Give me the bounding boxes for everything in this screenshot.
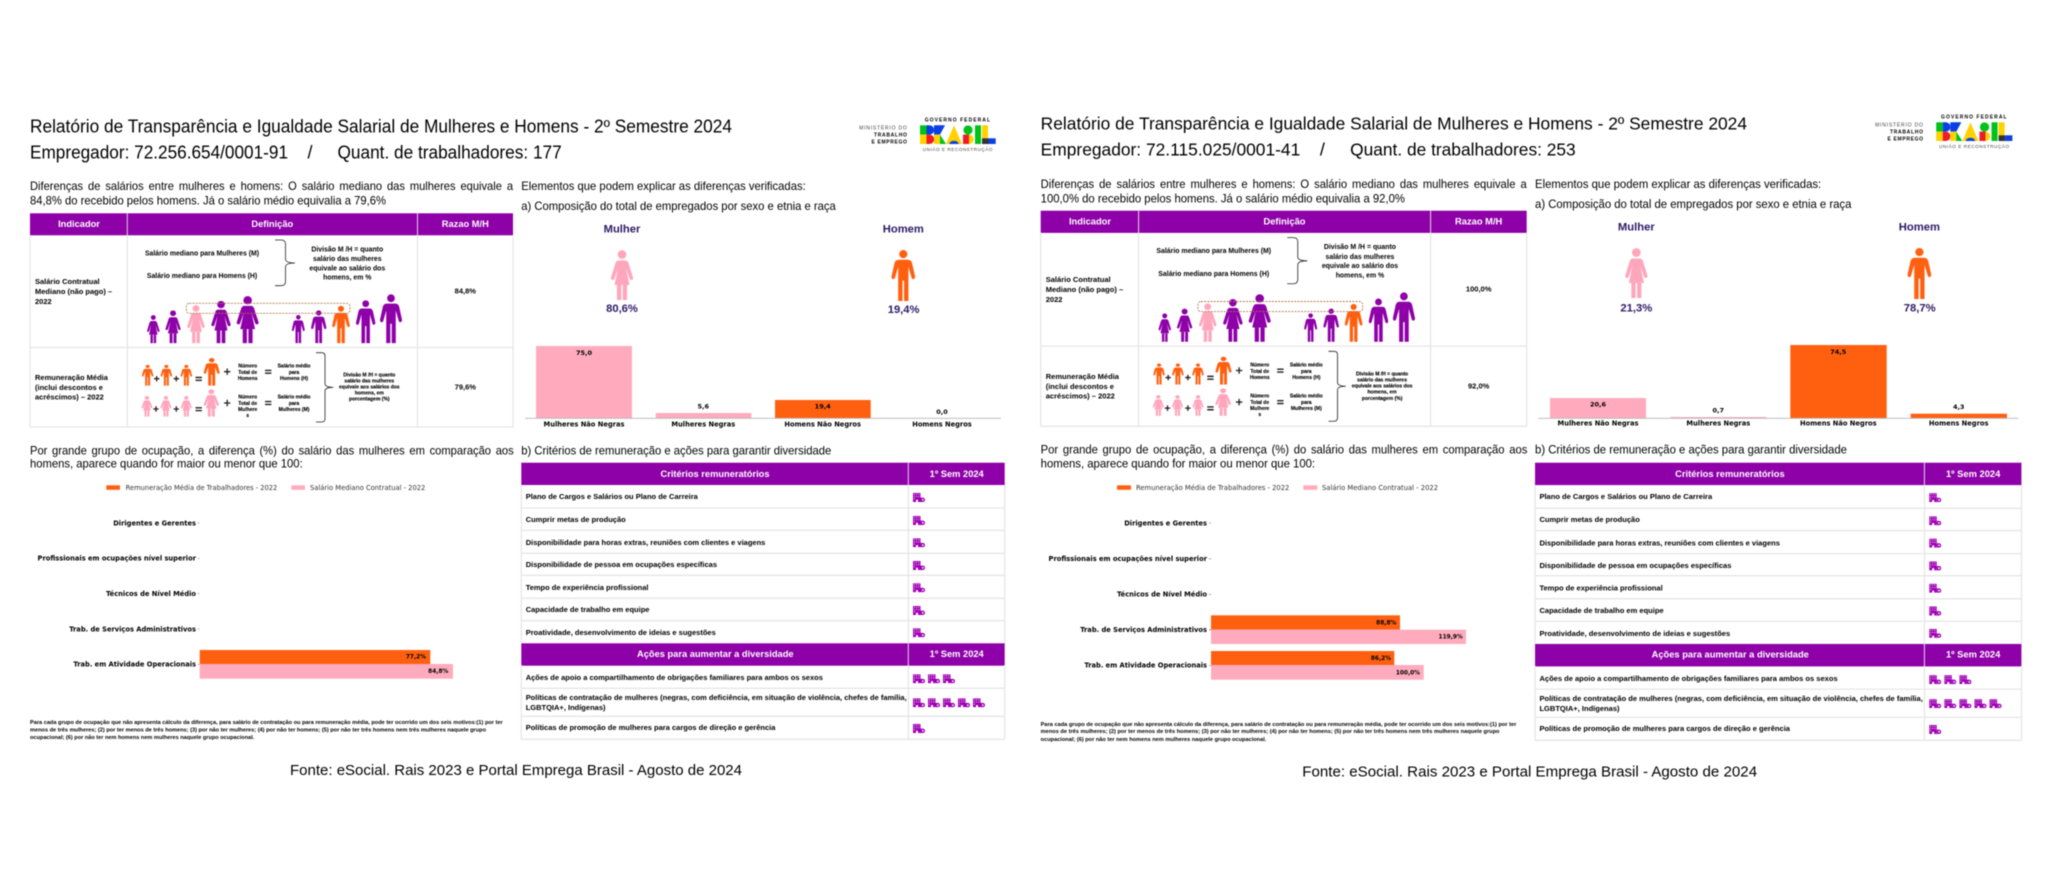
composition: woman share: Mulher [1618,222,1655,234]
criteria rows [526,492,925,637]
logo: Ministério do Trabalho e Emprego and Governo Federal: E EMPREGO [1887,137,1924,142]
row: remuneração média: porcentagem (%) [349,397,390,403]
bar chart: employees by sex and race [525,346,1001,428]
logo: Ministério do Trabalho e Emprego and Governo Federal: GOVERNO FEDERAL [1941,114,2008,120]
table header: Definição [1263,217,1306,227]
row: remuneração média: equivale aos salários dos [339,385,400,391]
row: salário contratual mediano: equivale ao salário dos [309,265,385,272]
bar chart: employees by sex and race: 19,4 [815,403,831,411]
row: remuneração média: homens, em [1367,390,1397,396]
formula: men: Número [238,364,257,370]
row: remuneração média: salário das mulheres [344,379,394,385]
row: salário contratual mediano: salário das mulheres [1325,254,1395,261]
logo: Ministério do Trabalho e Emprego and Governo Federal: TRABALHO [874,132,908,138]
formula: men: Homens [1250,375,1270,381]
logo: Ministério do Trabalho e Emprego and Governo Federal: UNIÃO E RECONSTRUÇÃO [923,146,993,152]
header: actions [637,649,985,659]
row: salário contratual mediano: 2022 [35,297,52,306]
table header: Indicador [58,219,100,229]
row: salário contratual mediano: 84,8% [455,286,476,295]
formula: men: Homens (H) [280,376,308,382]
salary difference text [30,179,513,208]
bar chart: employees by sex and race: 4,3 [1953,403,1964,411]
bar chart: occupation groups [1049,484,1466,680]
report 2: employer 72.115.025/0001-41 [1041,113,2021,781]
row: remuneração média: Remuneração Média [35,373,109,382]
action rows: LGBTQIA+, Indígenas) [1539,704,1620,713]
heading: elements that explain differences: Elementos que podem explicar as diferenças verificadas: [521,179,806,193]
logo: Ministério do Trabalho e Emprego and Governo Federal: MINISTÉRIO DO [1875,121,1924,128]
logo: Ministério do Trabalho e Emprego and Governo Federal [1875,114,2012,149]
action rows: Políticas de contratação de mulheres (negras, com deficiência, em situação de violência, chefes de família, [1539,694,1923,703]
salary difference text [1041,177,1527,205]
composition: man share: Homem [1899,222,1940,234]
bar chart: employees by sex and race: Mulheres Não Negras [544,420,624,428]
row: salário contratual mediano: Salário mediano para Mulheres (M) [145,250,259,257]
row: remuneração média: acréscimos) – 2022 [35,393,104,402]
row: remuneração média [1046,351,1490,421]
bar chart: occupation groups: Dirigentes e Gerentes [113,519,196,527]
heading: elements that explain differences: a) Composição do total de empregados por sexo e etnia e raça [521,199,836,213]
formula: men: para [1301,369,1312,375]
action rows: Políticas de promoção de mulheres para cargos de direção e gerência [1539,724,1791,733]
composition: man share [883,224,924,316]
source: Fonte: eSocial. Rais 2023 e Portal Emprega Brasil - Agosto de 2024 [1302,764,1757,781]
footnote: menos de três mulheres; (2) por ter menos de três homens; (3) por não ter mulheres; (4) por não ter homens; (5) por não ter três homens nem três mulheres naquele grupo [1041,729,1500,735]
employer id and workers count: / [308,142,313,162]
legend [106,484,425,492]
formula: women: Número [1250,394,1269,400]
bar chart: employees by sex and race: 5,6 [698,403,710,411]
header: actions [1652,650,2001,660]
occupation group text [30,443,514,470]
heading b: b) Critérios de remuneração e ações para garantir diversidade [1535,442,1847,456]
row: remuneração média: Divisão M /H = quanto [343,373,395,379]
table: indicators [30,213,513,427]
bar chart: employees by sex and race: 0,7 [1713,406,1724,414]
logo: Ministério do Trabalho e Emprego and Governo Federal: GOVERNO FEDERAL [925,117,991,123]
bar chart: occupation groups: Trab. de Serviços Administrativos [1080,626,1207,634]
criteria rows: Disponibilidade para horas extras, reuniões com clientes e viagens [1539,538,1780,547]
table header: Definição [251,219,294,229]
header: actions: Ações para aumentar a diversidade [1652,650,1809,660]
row: salário contratual mediano: Salário mediano para Homens (H) [1158,271,1269,278]
criteria rows [1539,492,1941,638]
employer id and workers count [30,142,562,162]
criteria rows: Capacidade de trabalho em equipe [526,605,649,614]
header: criteria [660,469,985,479]
composition: woman share: 80,6% [606,303,638,315]
row: salário contratual mediano: salário das mulheres [313,256,382,263]
legend: Remuneração Média de Trabalhadores - 2022 [1136,484,1289,492]
bar chart: employees by sex and race: 20,6 [1590,400,1606,408]
row: salário contratual mediano: Salário Contratual [1046,275,1111,284]
bar chart: employees by sex and race: 74,5 [1830,348,1847,356]
header: criteria: Critérios remuneratórios [660,469,770,479]
footnote: ocupacional; (6) por não ter nem homens nem mulheres naquele grupo ocupacional. [1041,737,1267,743]
legend [1117,484,1438,492]
action rows [526,673,985,733]
bar chart: employees by sex and race: 75,0 [576,349,592,357]
bar chart: occupation groups: Trab. em Atividade Operacionais [1084,662,1207,670]
criteria rows: Proatividade, desenvolvimento de ideias e sugestões [526,628,716,637]
occupation group text [1041,442,1527,470]
bar chart: occupation groups: 119,9% [1439,635,1463,641]
bar chart: occupation groups: Profissionais em ocupações nível superior [38,555,197,563]
bar chart: employees by sex and race: 0,0 [936,408,948,416]
formula: women: Mulhere [238,407,258,413]
salary difference text: Diferenças de salários entre mulheres e homens: O salário mediano das mulheres equivale a [1041,177,1527,191]
composition: man share [1899,222,1940,314]
figures: women and men by salary [1158,292,1415,342]
logo: Ministério do Trabalho e Emprego and Governo Federal [859,117,996,152]
bar chart: occupation groups [38,484,453,679]
logo: Ministério do Trabalho e Emprego and Governo Federal: E EMPREGO [871,140,908,146]
formula: men [142,358,310,386]
report title: Relatório de Transparência e Igualdade Salarial de Mulheres e Homens - 2º Semestre 2024 [1041,113,1747,133]
formula: women: Mulhere [1250,406,1270,412]
bar chart: occupation groups: 86,2% [1371,656,1391,662]
table header: Razao M/H [1455,217,1503,227]
row: salário contratual mediano: Mediano (não pago) – [35,287,112,296]
formula: women: Total de [238,401,257,407]
header: criteria: 1º Sem 2024 [930,469,985,479]
criteria rows: Tempo de experiência profissional [1539,583,1663,592]
composition: woman share [604,224,641,315]
bar chart: employees by sex and race [1538,345,2018,428]
criteria rows: Disponibilidade para horas extras, reuniões com clientes e viagens [526,538,765,547]
action rows: LGBTQIA+, Indígenas) [526,703,606,712]
bar chart: occupation groups: 100,0% [1396,670,1420,676]
report 1: employer 72.256.654/0001-91 [30,116,1005,779]
row: salário contratual mediano: equivale ao salário dos [1322,263,1398,270]
row: salário contratual mediano [1046,238,1492,342]
action rows [1539,674,2002,734]
salary difference text: 100,0% do recebido pelos homens. Já o salário médio equivalia a 92,0% [1041,192,1405,205]
bar chart: occupation groups: 84,8% [428,669,448,675]
formula: women: Mulheres (M) [279,407,310,413]
formula: men: Homens (H) [1292,375,1321,381]
composition: man share: 19,4% [888,304,920,316]
employer id and workers count: Empregador: 72.115.025/0001-41 [1041,139,1300,159]
action rows: Políticas de promoção de mulheres para cargos de direção e gerência [526,723,776,732]
row: remuneração média: equivale aos salários dos [1352,384,1413,390]
header: criteria [1675,469,2001,479]
figures: women and men by salary [147,294,402,343]
criteria rows: Capacidade de trabalho em equipe [1539,606,1664,615]
table: criteria and actions [521,463,1005,739]
title block [30,116,732,162]
employer id and workers count: Empregador: 72.256.654/0001-91 [30,142,288,162]
row: remuneração média: 92,0% [1468,381,1490,390]
row: salário contratual mediano: Salário mediano para Homens (H) [147,273,257,280]
composition: man share: Homem [883,224,924,236]
row: salário contratual mediano: Salário Contratual [35,277,100,286]
heading: elements that explain differences [1535,177,1852,211]
footnote: menos de três mulheres; (2) por ter menos de três homens; (3) por não ter mulheres; (4) por não ter homens; (5) por não ter três homens nem três mulheres naquele grupo [30,728,487,734]
criteria rows: Cumprir metas de produção [526,515,626,524]
title block [1041,113,2012,159]
heading: elements that explain differences: Elementos que podem explicar as diferenças verificadas: [1535,177,1821,191]
criteria rows: Proatividade, desenvolvimento de ideias e sugestões [1539,629,1730,638]
formula: men: Número [1250,362,1269,368]
row: remuneração média: Divisão M /H = quanto [1356,372,1408,378]
header: criteria: 1º Sem 2024 [1946,469,2001,479]
row: remuneração média: homens, em [355,391,384,397]
occupation group text: homens, aparece quando for maior ou menor que 100: [1041,456,1315,470]
salary difference text: Diferenças de salários entre mulheres e homens: O salário mediano das mulheres equivale a [30,179,513,193]
formula: women: Salário médio [1290,394,1323,400]
bar chart: occupation groups: 77,2% [406,655,426,661]
table header: Razao M/H [442,219,489,229]
row: salário contratual mediano: 2022 [1046,295,1062,304]
criteria rows: Disponibilidade de pessoa em ocupações específicas [526,560,717,569]
action rows: Ações de apoio a compartilhamento de obrigações familiares para ambos os sexos [1539,674,1838,683]
table: indicators [1041,211,1527,426]
table header [1069,217,1503,227]
employer id and workers count: Quant. de trabalhadores: 177 [338,142,562,162]
header: actions: 1º Sem 2024 [930,649,985,659]
legend: Salário Mediano Contratual - 2022 [1322,484,1438,492]
bar chart: employees by sex and race: Mulheres Negras [671,420,735,428]
criteria rows: Tempo de experiência profissional [526,583,649,592]
row: salário contratual mediano: Salário mediano para Mulheres (M) [1156,248,1271,255]
formula: men: Total de [1250,369,1269,375]
formula: men: para [289,370,299,376]
footnote: ocupacional; (6) por não ter nem homens nem mulheres naquele grupo ocupacional. [30,735,255,741]
row: salário contratual mediano: Divisão M /H = quanto [311,246,383,253]
bar chart: occupation groups: Trab. em Atividade Operacionais [73,661,196,669]
row: remuneração média: Remuneração Média [1046,372,1120,381]
criteria rows: Disponibilidade de pessoa em ocupações específicas [1539,561,1731,570]
source: Fonte: eSocial. Rais 2023 e Portal Emprega Brasil - Agosto de 2024 [290,762,742,779]
employer id and workers count: / [1320,139,1326,159]
formula: women: Salário médio [278,395,310,401]
logo: Ministério do Trabalho e Emprego and Governo Federal: TRABALHO [1890,129,1924,135]
bar chart: occupation groups: Dirigentes e Gerentes [1124,519,1207,527]
row: remuneração média: (inclui descontos e [35,383,103,392]
heading: elements that explain differences: a) Composição do total de empregados por sexo e etnia e raça [1535,197,1852,211]
composition: woman share: Mulher [604,224,641,236]
header: criteria: Critérios remuneratórios [1675,469,1785,479]
row: remuneração média: (inclui descontos e [1046,382,1114,391]
row: salário contratual mediano: Divisão M /H = quanto [1324,244,1396,251]
footnote: Para cada grupo de ocupação que não apresenta cálculo da diferença, para salário de contratação ou para remuneração média, pode ter ocorrido um dos seis motivos:(1) por ter [30,720,504,726]
table: criteria and actions [1535,463,2021,740]
row: salário contratual mediano: Mediano (não pago) – [1046,285,1123,294]
row: remuneração média: salário das mulheres [1357,378,1407,384]
formula: women: s [246,413,249,419]
heading: elements that explain differences [521,179,836,213]
bar chart: occupation groups: Técnicos de Nível Médio [1117,591,1207,599]
bar chart: occupation groups: Profissionais em ocupações nível superior [1049,555,1208,563]
logo: Ministério do Trabalho e Emprego and Governo Federal: UNIÃO E RECONSTRUÇÃO [1939,143,2010,149]
formula: women: Mulheres (M) [1291,406,1322,412]
bar chart: employees by sex and race: Homens Não Negros [1800,420,1877,428]
employer id and workers count: Quant. de trabalhadores: 253 [1350,139,1576,159]
formula: men: Homens [238,376,258,382]
footnote [30,720,504,741]
row: remuneração média [35,353,476,422]
legend: Remuneração Média de Trabalhadores - 2022 [126,484,277,492]
report title: Relatório de Transparência e Igualdade Salarial de Mulheres e Homens - 2º Semestre 2024 [30,116,732,136]
occupation group text: Por grande grupo de ocupação, a diferença (%) do salário das mulheres em comparação aos [30,443,514,457]
bar chart: employees by sex and race: Homens Negros [1929,420,1988,428]
occupation group text: homens, aparece quando for maior ou menor que 100: [30,456,303,470]
row: remuneração média: acréscimos) – 2022 [1046,392,1115,401]
logo: Ministério do Trabalho e Emprego and Governo Federal: MINISTÉRIO DO [859,124,908,131]
formula: men: Total de [238,370,257,376]
table header [58,219,489,229]
row: salário contratual mediano [35,240,476,343]
heading b: b) Critérios de remuneração e ações para garantir diversidade [521,443,832,457]
composition: woman share: 21,3% [1620,302,1652,314]
salary difference text: 84,8% do recebido pelos homens. Já o salário médio equivalia a 79,6% [30,194,386,208]
legend: Salário Mediano Contratual - 2022 [310,484,425,492]
row: salário contratual mediano: 100,0% [1466,284,1492,293]
bar chart: occupation groups: 88,8% [1376,620,1396,626]
formula: women: Número [238,395,257,401]
footnote [1041,722,1517,743]
formula: women: s [1258,412,1261,418]
formula: women [1153,388,1323,418]
table header: Indicador [1069,217,1111,227]
formula: men [1153,357,1323,385]
employer id and workers count [1041,139,1576,159]
bar chart: occupation groups: Trab. de Serviços Administrativos [69,625,196,633]
row: salário contratual mediano: homens, em % [323,274,371,281]
formula: women: Total de [1250,400,1269,406]
bar chart: employees by sex and race: Mulheres Negras [1686,420,1750,428]
header: actions: Ações para aumentar a diversidade [637,649,794,659]
header: actions: 1º Sem 2024 [1946,650,2001,660]
bar chart: employees by sex and race: Homens Não Negros [784,420,861,428]
row: remuneração média: 79,6% [455,382,476,391]
bar chart: employees by sex and race: Homens Negros [912,420,972,428]
composition: woman share [1618,222,1655,314]
formula: women [141,389,310,419]
row: remuneração média: porcentagem (%) [1362,396,1403,402]
criteria rows: Plano de Cargos e Salários ou Plano de Carreira [526,492,699,501]
criteria rows: Plano de Cargos e Salários ou Plano de Carreira [1539,492,1713,501]
formula: men: Salário médio [1290,362,1323,368]
formula: women: para [289,401,299,407]
formula: women: para [1301,400,1312,406]
composition: man share: 78,7% [1904,302,1936,314]
formula: men: Salário médio [278,364,310,370]
action rows: Políticas de contratação de mulheres (negras, com deficiência, em situação de violência, chefes de família, [526,693,907,702]
bar chart: employees by sex and race: Mulheres Não Negras [1558,420,1638,428]
action rows: Ações de apoio a compartilhamento de obrigações familiares para ambos os sexos [526,673,823,682]
occupation group text: Por grande grupo de ocupação, a diferença (%) do salário das mulheres em comparação aos [1041,442,1527,456]
bar chart: occupation groups: Técnicos de Nível Médio [106,590,196,598]
criteria rows: Cumprir metas de produção [1539,515,1640,524]
footnote: Para cada grupo de ocupação que não apresenta cálculo da diferença, para salário de contratação ou para remuneração média, pode ter ocorrido um dos seis motivos:(1) por ter [1041,722,1517,728]
row: salário contratual mediano: homens, em % [1336,272,1384,279]
